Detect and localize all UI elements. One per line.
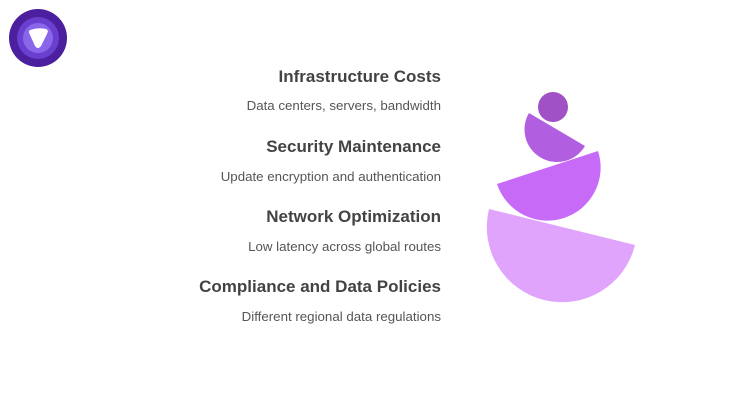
text: compliance desc: Different regional data regulations: [242, 309, 441, 324]
heading: Network Optimization: Network Optimization: [266, 207, 441, 226]
text: infra desc: Data centers, servers, bandwidth: [247, 98, 441, 113]
text: security desc: Update encryption and authentication: [221, 169, 441, 184]
heading: Security Maintenance: Security Maintenance: [266, 137, 441, 156]
icon: logo: [9, 9, 67, 67]
heading: Infrastructure Costs: Infrastructure Costs: [279, 67, 441, 86]
text: network desc: Low latency across global routes: [248, 239, 441, 254]
heading: Compliance: Compliance and Data Policies: [199, 277, 441, 296]
